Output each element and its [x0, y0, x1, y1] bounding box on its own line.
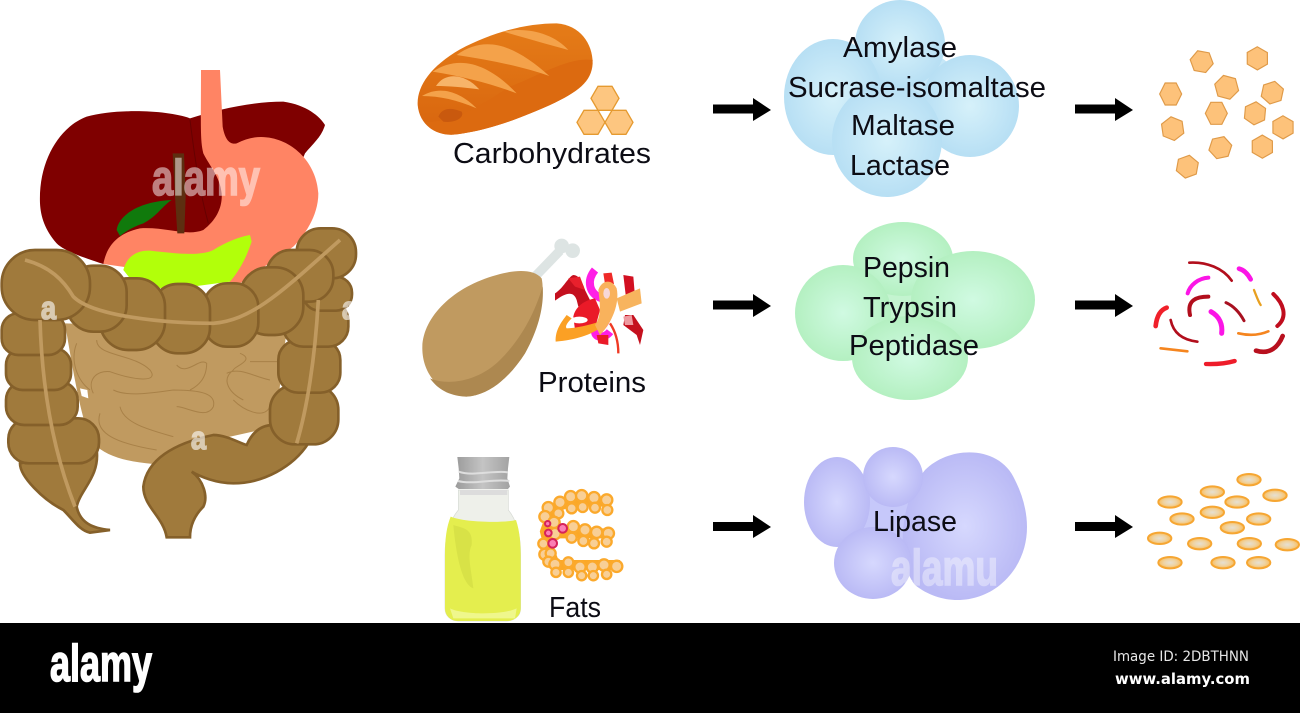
enzyme names: [788, 32, 1046, 182]
watermark: alamy over cloud: alamu: [891, 540, 998, 596]
panel: carbohydrate enzymes cloud: [784, 0, 1046, 197]
label: Fats: Fats: [549, 592, 601, 624]
colon bands: [25, 240, 340, 507]
lilac cloud: [804, 447, 1027, 600]
enzyme names: Lactase: [850, 150, 950, 182]
enzyme names: [849, 252, 979, 362]
enzyme names: Maltase: [851, 110, 955, 142]
bile duct: [173, 153, 186, 233]
enzyme names: Sucrase-isomaltase: [788, 72, 1046, 104]
arrows: [713, 98, 1133, 538]
footer bar: [0, 623, 1300, 713]
icon: protein ribbon: [555, 270, 643, 353]
watermark: a left: a: [41, 290, 56, 326]
arrow: proteins to enzymes: [713, 294, 771, 317]
icon: chicken leg: [422, 239, 580, 397]
row: proteins food: [422, 239, 646, 399]
row: carbohydrates food: [418, 23, 651, 170]
panel: protein enzymes cloud: [795, 222, 1035, 400]
products: sugar hexagons: [1158, 44, 1298, 180]
enzyme names: Peptidase: [849, 330, 979, 362]
enzyme names: Amylase: [843, 32, 957, 64]
label: Carbohydrates: Carbohydrates: [453, 138, 651, 170]
icon: bread loaf: [418, 23, 593, 135]
watermark: alamy over stomach: alamy: [152, 150, 260, 206]
arrow: enzymes to sugars: [1075, 98, 1133, 121]
row: fats food: [445, 457, 622, 624]
products: fatty acid droplets: [1148, 474, 1299, 568]
watermark: a centre: a: [191, 420, 206, 456]
arrow: fats to enzyme: [713, 515, 771, 538]
enzyme name: Lipase: [873, 506, 957, 538]
footer logo: alamy: [50, 635, 152, 693]
arrow: carbohydrates to enzymes: [713, 98, 771, 121]
digestive system illustration: [2, 70, 356, 537]
icon: glucose hexagons: [577, 86, 633, 134]
website: www.alamy.com: [1115, 670, 1250, 688]
watermark: a right: a: [342, 290, 357, 326]
stomach: [103, 70, 318, 283]
label: Proteins: Proteins: [538, 367, 646, 399]
products: peptide fragments: [1156, 263, 1284, 364]
arrow: enzyme to lipids: [1075, 515, 1133, 538]
gallbladder: [117, 200, 172, 236]
image id: Image ID: 2DBTHNN: [1113, 649, 1249, 665]
icon: oil bottle: [445, 457, 521, 621]
enzyme names: Trypsin: [863, 292, 957, 324]
icon: triglyceride molecule: [538, 490, 622, 580]
liver: [40, 102, 325, 264]
enzyme names: Pepsin: [863, 252, 950, 284]
rectum loop: [143, 425, 308, 537]
large intestine: [2, 228, 356, 537]
blue cloud: [784, 0, 1019, 197]
pancreas: [123, 235, 252, 290]
sigmoid colon: [20, 450, 110, 533]
panel: fat enzyme cloud: [804, 447, 1027, 600]
green cloud: [795, 222, 1035, 400]
arrow: enzymes to peptides: [1075, 294, 1133, 317]
small intestine: [65, 323, 287, 464]
